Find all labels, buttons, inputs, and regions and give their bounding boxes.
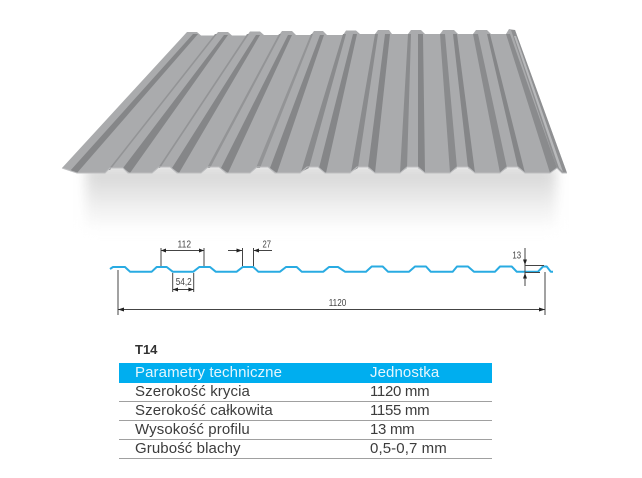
- row: sheet thickness: Grubość blachy: [135, 440, 241, 457]
- row: total width: 1155 mm: [370, 402, 429, 419]
- row: sheet thickness: [119, 440, 492, 459]
- dimension labels: [176, 239, 521, 309]
- table header: [119, 363, 492, 383]
- table header: Parametry techniczne: [135, 364, 282, 381]
- row: profile height: Wysokość profilu: [135, 421, 250, 438]
- rib falling faces: [70, 34, 525, 173]
- sheet shadow: [86, 166, 556, 228]
- dimension lines: [118, 248, 545, 315]
- row: coverage width: Szerokość krycia: [135, 383, 250, 400]
- row: coverage width: [119, 383, 492, 402]
- row: coverage width: 1120 mm: [370, 383, 429, 400]
- dimension labels: 27: [262, 239, 271, 250]
- rib rising faces: [108, 34, 313, 170]
- specification table: [119, 363, 492, 459]
- dimension labels: 112: [178, 239, 191, 250]
- table header: Jednostka: [370, 364, 439, 381]
- right edge lip: [511, 30, 567, 173]
- dimension labels: 1120: [329, 298, 347, 309]
- blue profile line: [110, 266, 553, 272]
- front edge highlight: [62, 167, 567, 173]
- row: sheet thickness: 0,5-0,7 mm: [370, 440, 447, 457]
- table title: T14: [135, 342, 157, 357]
- dimension labels: 54,2: [176, 277, 192, 288]
- dimension labels: 13: [512, 250, 521, 261]
- row: total width: Szerokość całkowita: [135, 402, 273, 419]
- sheet base: [62, 29, 567, 173]
- dimension arrowheads: [118, 248, 545, 312]
- corrugated metal sheet: [62, 29, 567, 174]
- row: total width: [119, 402, 492, 421]
- row: profile height: 13 mm: [370, 421, 414, 438]
- row: profile height: [119, 421, 492, 440]
